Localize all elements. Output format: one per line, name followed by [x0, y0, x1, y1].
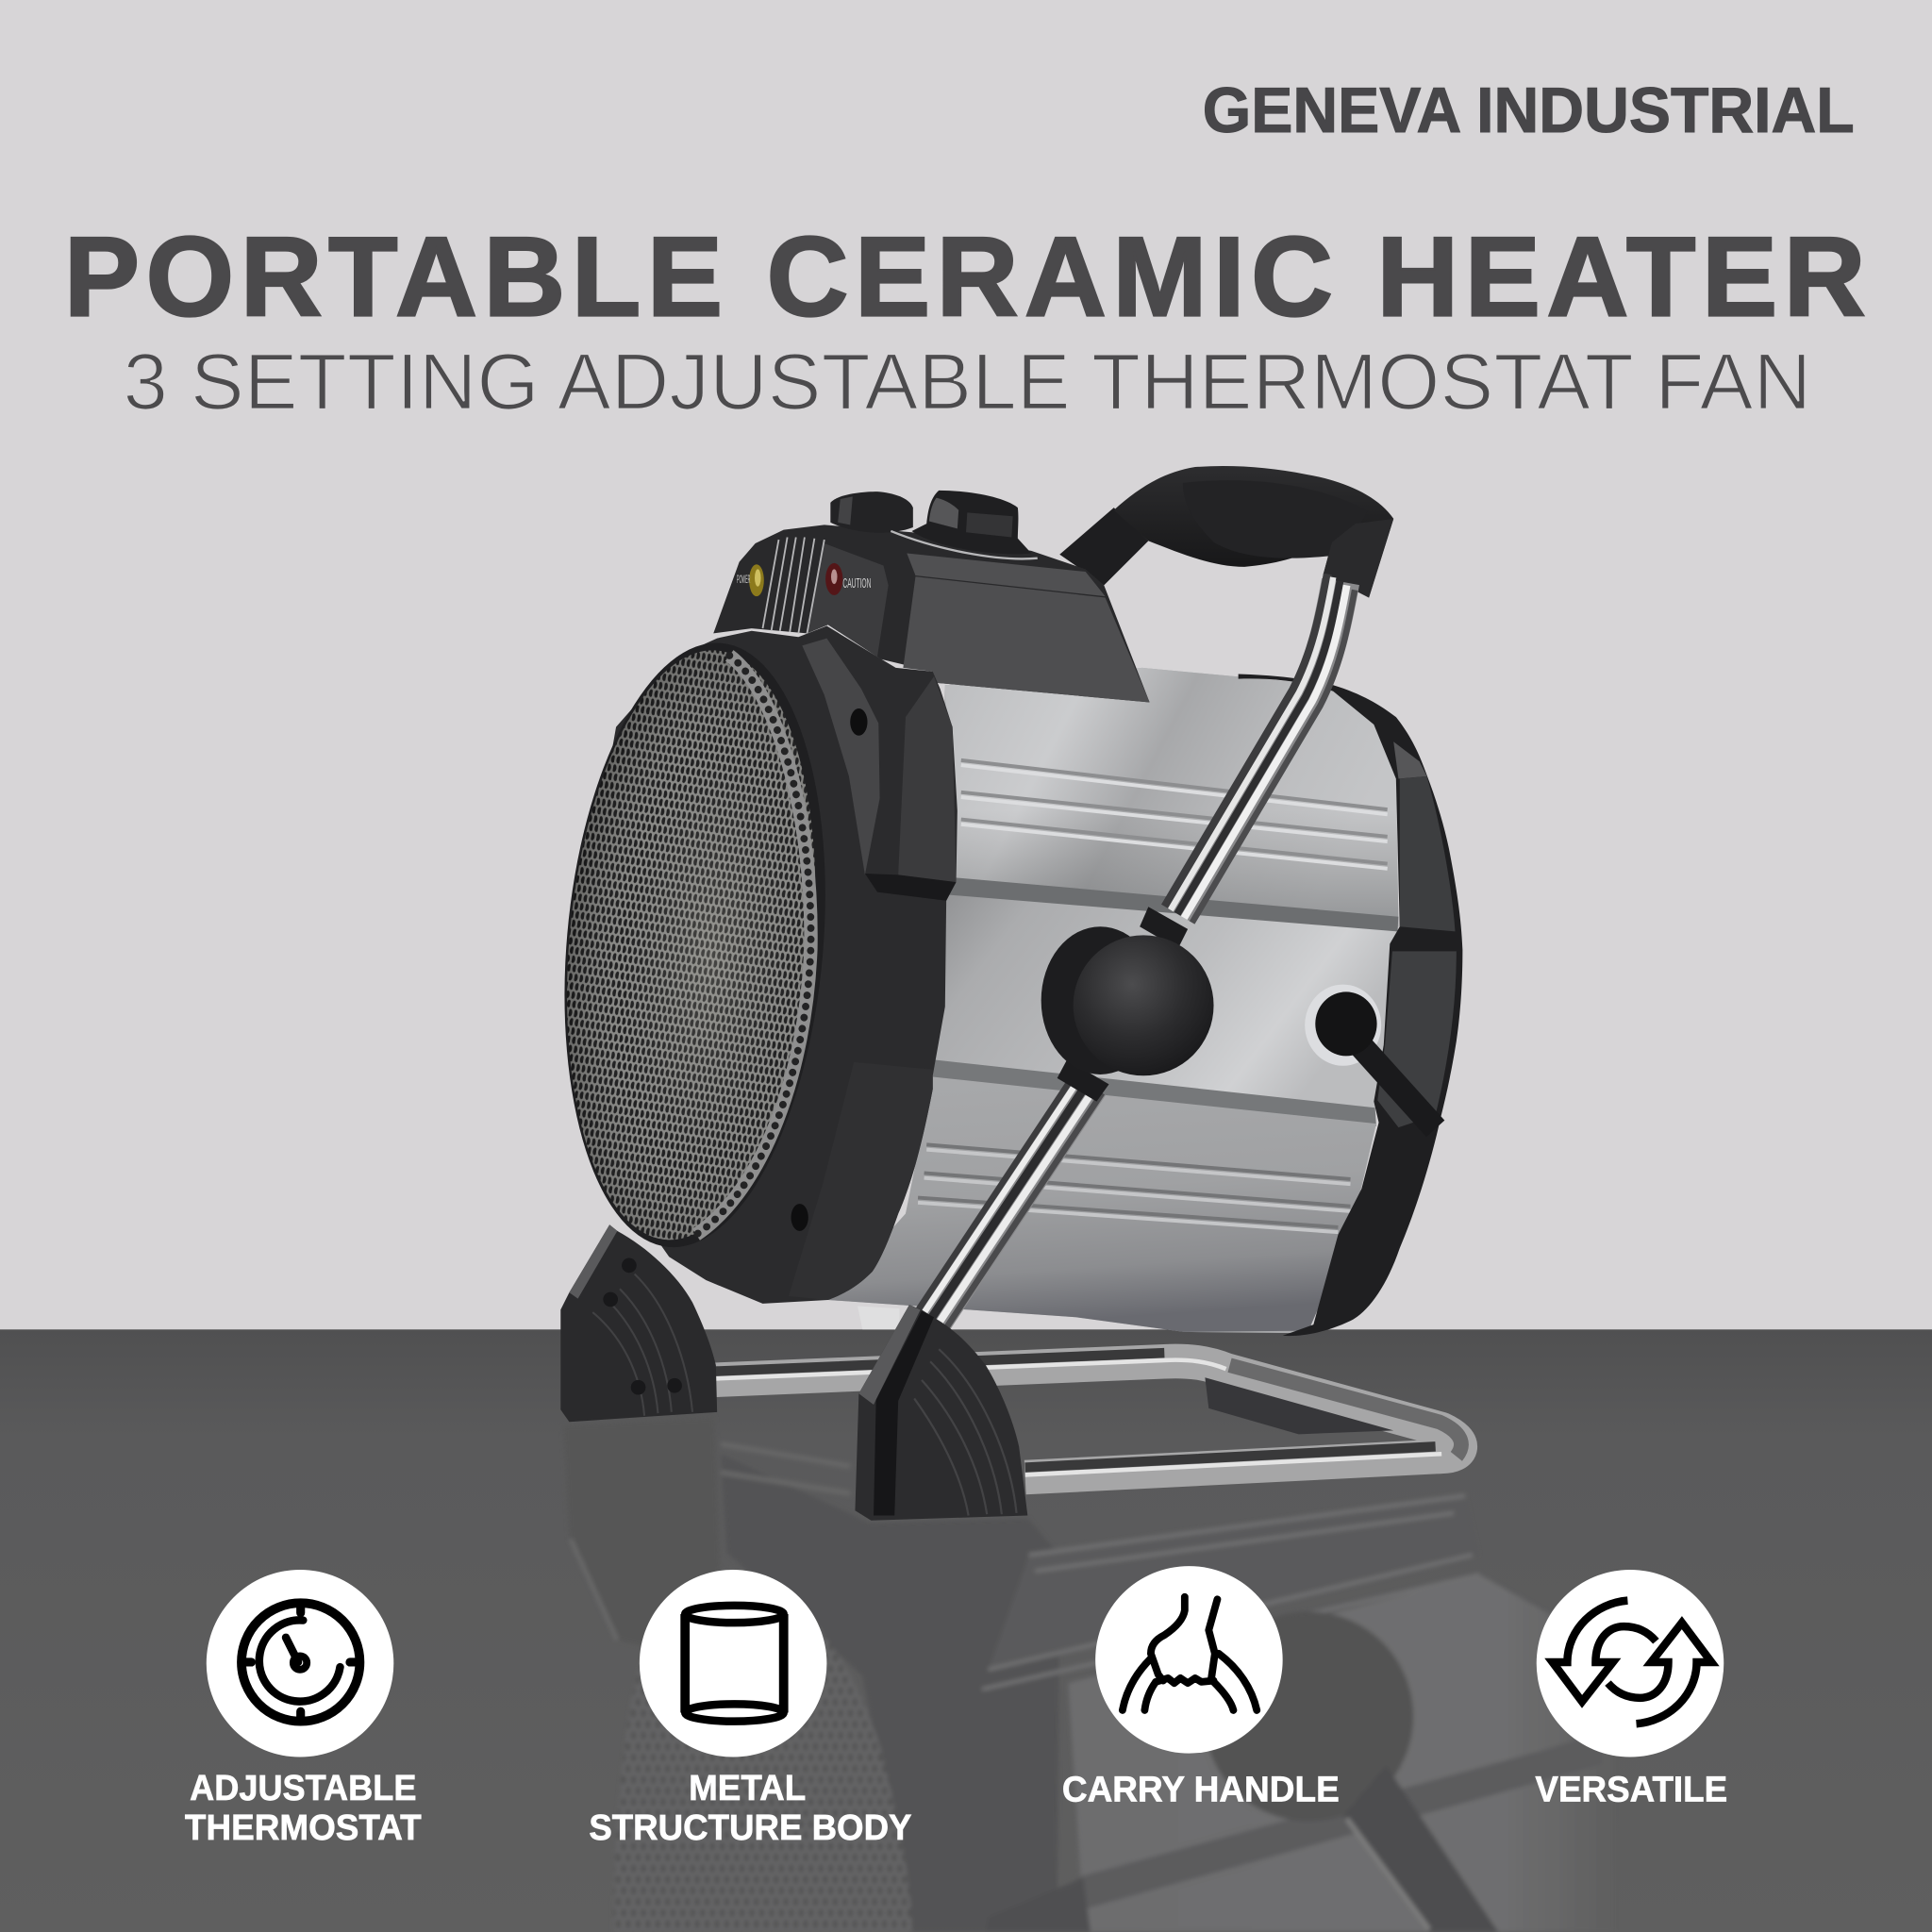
- silver body: [828, 668, 1398, 1333]
- arrow two: [1607, 1623, 1711, 1724]
- reflection: tube highlight: [1347, 1819, 1429, 1929]
- reflection: band highlights: [982, 1496, 1480, 1690]
- lower body panel: [828, 1077, 1376, 1332]
- tube dark stripe: [1177, 581, 1340, 914]
- gauge inner arc: [259, 1620, 340, 1702]
- feature: versatile: [1535, 1570, 1727, 1810]
- tube highlight right: [1184, 585, 1347, 918]
- reflection: silver body: [1068, 1574, 1614, 1932]
- gauge ring: [242, 1603, 359, 1722]
- gauge ticks: [242, 1605, 358, 1720]
- ridge 6 light: [918, 1203, 1338, 1232]
- reflection: base rail ghost: [721, 1444, 850, 1493]
- reflection: dark housing band: [721, 1454, 1059, 1932]
- right knob: [891, 491, 1038, 558]
- screw 3: [631, 1380, 645, 1395]
- rear ring light band: [1393, 741, 1426, 778]
- left foot edge: [569, 1224, 617, 1299]
- grill curved edge: [696, 656, 811, 1235]
- gauge hub: [293, 1656, 307, 1670]
- housing shoulder block: [898, 676, 957, 882]
- control panel lighter area: [808, 543, 889, 657]
- feature: adjustable thermostat: [185, 1570, 422, 1848]
- caution LED: [825, 563, 842, 595]
- ridge 5: [924, 1173, 1351, 1207]
- reflection: rear foot: [563, 1417, 721, 1651]
- label: VERSATILE: [1535, 1771, 1727, 1810]
- icon circle: [207, 1570, 393, 1757]
- cylinder sides: [685, 1614, 784, 1713]
- label line 2: THERMOSTAT: [185, 1808, 422, 1848]
- slat 1: [762, 540, 778, 628]
- arrow one: [1553, 1601, 1656, 1702]
- left foot body: [560, 1224, 717, 1422]
- carry handle grip: [1114, 466, 1393, 597]
- mesh grill: [544, 640, 839, 1250]
- steel base rail: [712, 1353, 1461, 1477]
- tube edge: [907, 1074, 1074, 1327]
- reflection: crease band: [1082, 1743, 1574, 1907]
- reflection: lower wedge: [1057, 1879, 1091, 1932]
- title: PORTABLE CERAMIC HEATER: [64, 213, 1865, 340]
- floor: [0, 1329, 1932, 1932]
- hand right edge: [1208, 1599, 1217, 1679]
- tube edge: [1165, 574, 1327, 907]
- front foot dark strip: [874, 1311, 934, 1516]
- slat 2: [772, 537, 788, 631]
- ridge 4: [926, 1144, 1351, 1179]
- fingers: [1156, 1678, 1214, 1683]
- control box side face: [903, 576, 1150, 702]
- slat 6: [808, 540, 824, 633]
- power LED: [749, 564, 764, 596]
- control box top strip: [907, 553, 1106, 596]
- feature: carry handle: [1062, 1566, 1340, 1810]
- black front housing: [579, 626, 958, 1304]
- heater product illustration: CAUTION: [842, 576, 871, 591]
- left knob: [830, 491, 913, 533]
- left knob facet: [838, 496, 853, 525]
- tube base: [1178, 581, 1341, 914]
- shoulder screw hole: [850, 708, 868, 736]
- icon circle: [1095, 1566, 1283, 1754]
- control box body: [713, 525, 1150, 702]
- right knob facet: [929, 498, 958, 528]
- hand left edge: [1151, 1597, 1185, 1681]
- rail steel: [712, 1361, 1460, 1477]
- grill centre tint: [544, 640, 839, 1250]
- rear ring upper block: [1400, 776, 1456, 931]
- screw 1: [622, 1258, 637, 1273]
- tube highlight right: [927, 1088, 1094, 1341]
- cord port ring: [1305, 985, 1381, 1066]
- ridge 2: [961, 792, 1388, 837]
- feature: metal structure body: [589, 1570, 912, 1848]
- slat 3: [780, 537, 796, 631]
- left knob body: [830, 491, 913, 533]
- label: METAL: [689, 1769, 806, 1808]
- upper panel shade: [945, 668, 1398, 926]
- lower crease: [933, 1059, 1376, 1126]
- ridge 4 light: [926, 1150, 1351, 1184]
- rear black ring: [1239, 674, 1462, 1336]
- front foot: [855, 1305, 1027, 1521]
- icon: rotating arrows: [1553, 1601, 1711, 1724]
- left foot: [560, 1224, 717, 1422]
- ridge 5 light: [924, 1178, 1351, 1211]
- front foot body: [855, 1305, 1027, 1521]
- light patch under body: [858, 1306, 899, 1329]
- cord grommet: [1315, 991, 1377, 1056]
- icon circle: [1537, 1570, 1724, 1757]
- screw 4: [667, 1378, 682, 1393]
- cord: [1345, 1029, 1436, 1128]
- tube highlight left: [912, 1078, 1080, 1330]
- gauge needle: [286, 1638, 298, 1662]
- heater product illustration: POWER: [737, 574, 750, 586]
- rail highlight: [712, 1360, 1441, 1474]
- icon circle: [640, 1570, 826, 1757]
- ridge 1: [961, 760, 1388, 809]
- caution LED glint: [831, 569, 838, 584]
- rail dark band: [712, 1353, 1436, 1468]
- right knob body: [912, 491, 1031, 554]
- power LED glint: [755, 569, 761, 587]
- handle left outer: [1123, 1658, 1151, 1710]
- cylinder top: [685, 1606, 784, 1623]
- screw 2: [603, 1292, 618, 1307]
- carry handle arm: [1059, 508, 1148, 585]
- vent slats: [762, 537, 824, 633]
- reflection: ball: [1204, 1611, 1413, 1821]
- ridge 3 light: [961, 824, 1388, 869]
- cylinder bottom: [685, 1704, 784, 1722]
- handle inner shade: [1183, 480, 1368, 558]
- label line 2: STRUCTURE BODY: [589, 1808, 912, 1848]
- brand name: GENEVA INDUSTRIAL: [1203, 75, 1855, 146]
- label: CARRY HANDLE: [1062, 1771, 1340, 1810]
- left foot ridges: [592, 1274, 692, 1416]
- tube base: [922, 1084, 1090, 1337]
- heater product illustration: [541, 466, 1462, 1521]
- housing inner facet: [802, 639, 880, 874]
- rail diagonal shade: [1230, 1365, 1461, 1457]
- upper steel tube: [1165, 574, 1355, 923]
- pivot collars: [1058, 907, 1188, 1102]
- ridge 3: [961, 820, 1388, 864]
- slat 4: [790, 537, 805, 632]
- reflection: grill: [821, 1630, 911, 1924]
- knob base flare line: [891, 531, 1038, 558]
- icon: hand on handle: [1123, 1597, 1257, 1710]
- lower screw hole: [791, 1204, 808, 1231]
- handle left inner: [1144, 1682, 1156, 1710]
- right knob side: [966, 512, 1013, 537]
- grill edge holes: [696, 656, 811, 1235]
- slat 5: [798, 539, 814, 633]
- pivot cap: [1041, 926, 1159, 1074]
- lower shoulder block: [789, 1062, 933, 1300]
- tube dark edge: [935, 1093, 1102, 1345]
- front foot ridges: [914, 1349, 1017, 1516]
- middle body panel: [933, 894, 1397, 1109]
- rail wedge: [1205, 1377, 1393, 1434]
- lower ridges: [918, 1144, 1351, 1232]
- tube dark stripe: [920, 1083, 1088, 1336]
- icon: cylinder: [685, 1606, 784, 1722]
- handle right inner: [1214, 1682, 1233, 1710]
- floor reflection of heater: [563, 1417, 1614, 1932]
- handle end collar: [1324, 519, 1393, 597]
- subtitle: 3 SETTING ADJUSTABLE THERMOSTAT FAN: [124, 337, 1811, 426]
- icon: gauge: [242, 1603, 359, 1722]
- housing shoulder shadow: [865, 874, 957, 901]
- reflection: tube: [1343, 1766, 1498, 1932]
- upper crease: [945, 877, 1398, 934]
- pivot ball: [1074, 935, 1214, 1075]
- grill rim: [541, 632, 849, 1258]
- handle right outer: [1219, 1654, 1257, 1710]
- lower steel tube: [907, 1074, 1102, 1345]
- ridge 1 light: [961, 765, 1388, 814]
- reflection: rear foot edge: [570, 1540, 618, 1640]
- label: ADJUSTABLE: [190, 1769, 416, 1808]
- tube dark edge: [1192, 590, 1355, 923]
- ridge 6: [918, 1198, 1338, 1227]
- background wall: [0, 0, 1932, 1329]
- tube highlight left: [1171, 577, 1333, 910]
- upper body panel: [945, 668, 1398, 926]
- front foot edge: [858, 1305, 921, 1405]
- reflection: upper body band: [989, 1496, 1478, 1670]
- upper ridges: [961, 760, 1388, 869]
- rear ring lower block: [1377, 951, 1457, 1127]
- ridge 2 light: [961, 797, 1388, 841]
